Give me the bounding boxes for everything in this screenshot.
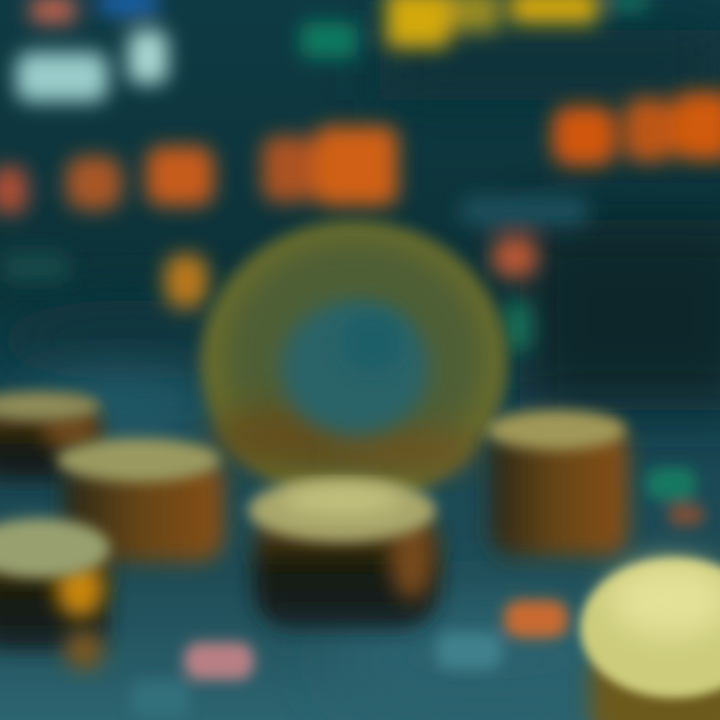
small markers on the table	[130, 468, 704, 720]
large central coin	[200, 220, 508, 504]
coin stack: centre front	[248, 478, 438, 628]
coin stack: far left	[0, 392, 100, 482]
large foreground coin	[580, 558, 720, 720]
market board: orange price tiles	[0, 92, 720, 352]
market board: top row tiles	[16, 0, 648, 102]
coin stack: right	[486, 410, 628, 556]
coin stack: lower left	[0, 518, 110, 670]
coin emblem	[281, 300, 429, 436]
coin stack: left middle	[56, 438, 224, 562]
